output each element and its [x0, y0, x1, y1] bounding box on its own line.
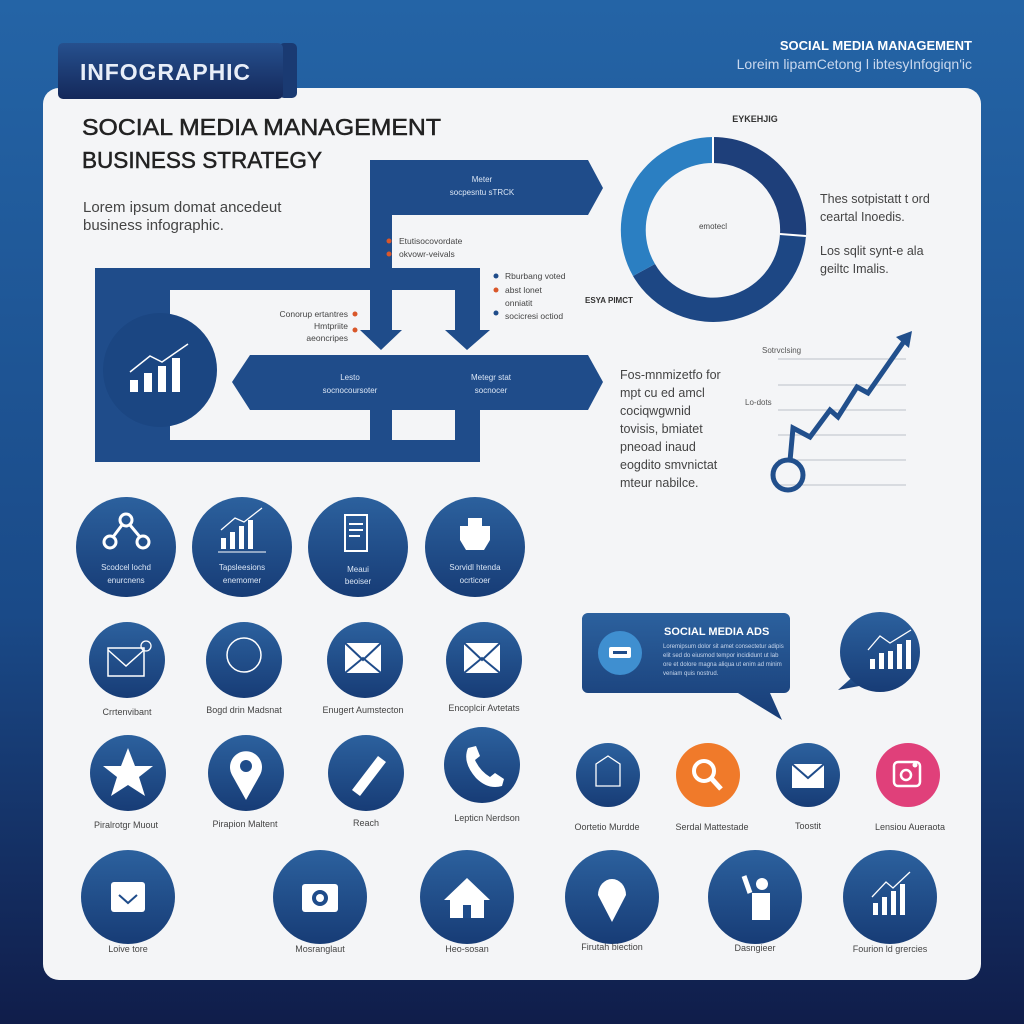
flow diagram: socpesntu sTRCK [450, 188, 515, 197]
title: BUSINESS STRATEGY [82, 147, 322, 173]
row 3 icons: Serdal Mattestade [675, 822, 749, 832]
social media ads box: Loremipsum dolor sit amet consectetur adipis [663, 644, 784, 650]
donut text: ceartal Inoedis. [820, 210, 905, 224]
infographic tab [58, 43, 297, 99]
row 1 icons [76, 497, 525, 597]
social media ads box: veniam quis nostrud. [663, 671, 719, 677]
row 2 icons: Encoplcir Avtetats [448, 703, 520, 713]
intro text: Lorem ipsum domat ancedeut [83, 199, 282, 216]
row 4 icons: Heo-sosan [445, 944, 489, 954]
line chart: Sotrvclsing [762, 346, 801, 355]
row 2 icons: Crrtenvibant [102, 707, 152, 717]
flow diagram: Lesto [340, 373, 360, 382]
donut chart [585, 114, 806, 322]
social media ads box [582, 613, 790, 720]
row 4 icons: Firutah biection [581, 942, 643, 952]
line chart [745, 331, 912, 490]
donut text: geiltc Imalis. [820, 262, 889, 276]
donut text: Thes sotpistatt t ord [820, 192, 930, 206]
middle paragraph: cociqwgwnid [620, 404, 691, 418]
header right text: Loreim lipamCetong l ibtesyInfogiqn'ic [737, 56, 972, 72]
middle paragraph: mpt cu ed amcl [620, 386, 705, 400]
flow callouts: Hmtpriite [314, 321, 348, 331]
flow callouts: okvowr-veivals [399, 249, 455, 259]
middle paragraph: eogdito smvnictat [620, 458, 718, 472]
row 4 icons: Loive tore [108, 944, 148, 954]
row 3 icons: Lensiou Aueraota [875, 822, 945, 832]
middle paragraph: tovisis, bmiatet [620, 422, 703, 436]
row 3 icons: Pirapion Maltent [212, 819, 278, 829]
row 2 icons: Enugert Aumstecton [322, 705, 404, 715]
row 4 icons: Fourion ld grercies [853, 944, 928, 954]
row 4 icons: Mosranglaut [295, 944, 345, 954]
row 1 icons: enurcnens [107, 576, 145, 585]
title: SOCIAL MEDIA MANAGEMENT [82, 114, 441, 140]
flow callouts: Etutisocovordate [399, 236, 463, 246]
intro text [83, 199, 282, 234]
infographic tab: INFOGRAPHIC [80, 59, 250, 85]
social media ads box: ore et dolore magna aliqua ut enim ad minim [663, 662, 782, 668]
donut text [820, 192, 930, 276]
row 3 icons: Reach [353, 818, 379, 828]
flow callouts: Rburbang voted [505, 271, 566, 281]
flow callouts: onniatit [505, 298, 533, 308]
row 1 icons: Scodcel lochd [101, 563, 151, 572]
flow callouts: socicresi octiod [505, 311, 563, 321]
middle paragraph: Fos-mnmizetfo for [620, 368, 721, 382]
main white panel [43, 88, 981, 980]
line chart: Lo-dots [745, 398, 772, 407]
flow diagram: Meter [472, 175, 493, 184]
row 1 icons: beoiser [345, 577, 371, 586]
row 2 icons [89, 622, 522, 717]
row 1 icons: Meaui [347, 565, 369, 574]
row 3 icons: Piralrotgr Muout [94, 820, 159, 830]
middle paragraph: pneoad inaud [620, 440, 696, 454]
middle paragraph [620, 368, 721, 490]
social media ads box: elit sed do eiusmod tempor incididunt ut lab [663, 653, 779, 659]
donut chart: emotecl [699, 222, 727, 231]
middle paragraph: mteur nabilce. [620, 476, 699, 490]
row 1 icons: ocrticoer [460, 576, 491, 585]
row 3 icons: Lepticn Nerdson [454, 813, 520, 823]
row 3 icons: Toostit [795, 821, 822, 831]
donut chart: EYKEHJIG [732, 114, 778, 124]
row 1 icons: enemomer [223, 576, 261, 585]
intro text: business infographic. [83, 217, 224, 234]
row 4 icons: Dasngieer [734, 943, 776, 953]
title [82, 114, 441, 173]
flow diagram: socnocer [475, 386, 508, 395]
flow callouts: aeoncripes [306, 333, 348, 343]
header right text: SOCIAL MEDIA MANAGEMENT [780, 38, 972, 53]
flow diagram [95, 160, 603, 462]
row 1 icons: Sorvidl htenda [449, 563, 501, 572]
row 2 icons: Bogd drin Madsnat [206, 705, 282, 715]
flow diagram: Metegr stat [471, 373, 512, 382]
row 1 icons: Tapsleesions [219, 563, 265, 572]
flow diagram: socnocoursoter [323, 386, 378, 395]
row 3 icons [90, 727, 945, 832]
row 4 icons [81, 850, 937, 954]
donut text: Los sqlit synt-e ala [820, 244, 924, 258]
header right text [737, 38, 972, 72]
speech bubble chart icon [838, 612, 920, 692]
donut chart: ESYA PIMCT [585, 296, 633, 305]
flow callouts: Conorup ertantres [279, 309, 348, 319]
flow callouts [279, 236, 566, 343]
flow callouts: abst lonet [505, 285, 542, 295]
social media ads box: SOCIAL MEDIA ADS [664, 626, 769, 638]
row 3 icons: Oortetio Murdde [574, 822, 640, 832]
